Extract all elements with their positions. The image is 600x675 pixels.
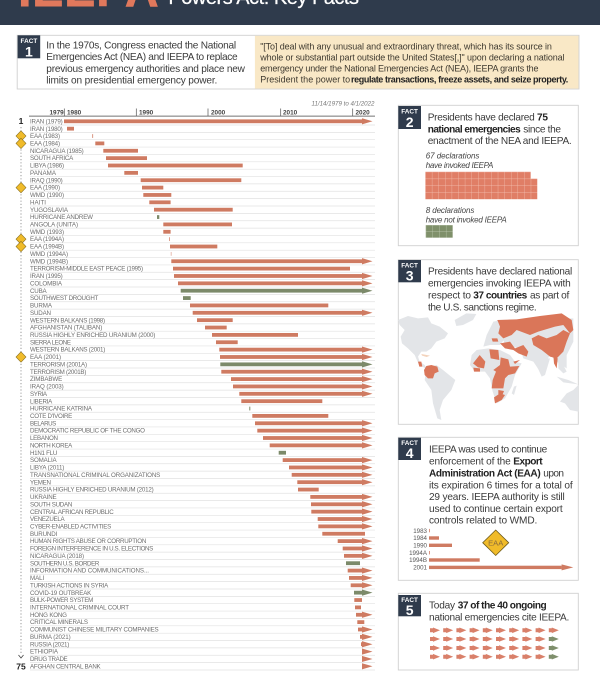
emergency rows: labels and duration bars: WMD (1993): [30, 229, 64, 236]
emergency rows: labels and duration bars: EAA (1990): [30, 185, 60, 192]
emergency rows: labels and duration bars: MALI: [30, 575, 45, 582]
quote box: emergency under the National Emergencies Act (NEA), IEEPA grants the: [260, 64, 538, 74]
fact 4 text: controls related to WMD.: [429, 516, 537, 527]
fact tag 5: FACT: [401, 597, 418, 604]
mini chart: EAA periods: [409, 528, 573, 572]
emergency rows: labels and duration bars: IRAQ (1990): [30, 177, 63, 184]
count track: 75: [16, 662, 26, 672]
fact 2 text: enactment of the NEA and IEEPA.: [428, 136, 572, 147]
panel: fact 5: [398, 593, 578, 670]
emergency rows: labels and duration bars: ZIMBABWE: [30, 376, 62, 383]
fact 4 text: Administration Act (EAA): [429, 468, 541, 479]
fact 1 text: Emergencies Act (NEA) and IEEPA to replace: [46, 52, 238, 63]
fact 1 text: [46, 40, 246, 87]
quote box: [255, 36, 578, 89]
mini chart: EAA periods: 2001: [413, 565, 428, 572]
fact 3 text: emergencies invoking IEEPA with: [428, 279, 571, 290]
emergency rows: labels and duration bars: BURUNDI: [30, 531, 58, 538]
fact 5 text: Today: [429, 601, 456, 612]
fact 2 text: [428, 112, 572, 147]
waffle label: invoked: 67 declarations: [426, 152, 479, 160]
waffle label: not invoked: have not invoked IEEPA: [426, 215, 507, 224]
emergency rows: labels and duration bars: BELARUS: [30, 420, 56, 427]
panel: fact 2: [398, 105, 578, 246]
emergency rows: labels and duration bars: IRAN (1995): [30, 273, 63, 280]
fact 4 text: upon: [543, 468, 564, 479]
emergency rows: labels and duration bars: INFORMATION AND COMMUNICATIONS...: [30, 568, 149, 575]
date range note: 11/14/1979 to 4/1/2022: [312, 100, 375, 108]
icon: EAA diamond sign: EAA: [488, 538, 504, 548]
emergency rows: labels and duration bars: [30, 118, 375, 670]
emergency rows: labels and duration bars: RUSSIA HIGHLY ENRICHED URANIUM (2012): [30, 487, 154, 494]
emergency rows: labels and duration bars: CYBER-ENABLED ACTIVITIES: [30, 523, 111, 530]
emergency rows: labels and duration bars: NORTH KOREA: [30, 442, 73, 449]
emergency rows: labels and duration bars: HURRICANE KATRINA: [30, 406, 93, 413]
fact tag 4: FACT: [401, 440, 418, 447]
waffle chart: 8 declarations: [426, 225, 453, 238]
fact 4 text: its expiration 6 times for a total of: [429, 480, 573, 491]
emergency rows: labels and duration bars: AFGHANISTAN (TALIBAN): [30, 325, 102, 332]
emergency rows: labels and duration bars: BURMA: [30, 303, 53, 310]
emergency rows: labels and duration bars: BURMA (2021): [30, 634, 71, 641]
fact 3 text: respect to: [428, 290, 471, 301]
emergency rows: labels and duration bars: LEBANON: [30, 435, 58, 442]
emergency rows: labels and duration bars: COLOMBIA: [30, 280, 63, 287]
emergency rows: labels and duration bars: TURKISH ACTIONS IN SYRIA: [30, 582, 109, 589]
emergency rows: labels and duration bars: YEMEN: [30, 479, 51, 486]
emergency rows: labels and duration bars: INTERNATIONAL CRIMINAL COURT: [30, 604, 129, 611]
fact tag 3: [398, 260, 421, 284]
emergency rows: labels and duration bars: AFGHAN CENTRAL BANK: [30, 663, 102, 670]
fact tag 3: FACT: [401, 262, 418, 270]
EAA diamond markers: [16, 131, 26, 362]
emergency rows: labels and duration bars: SOUTH SUDAN: [30, 501, 72, 508]
year axis: 2010: [283, 109, 298, 116]
fact 1 text: previous emergency authorities and place new: [46, 64, 246, 75]
year axis: 1979: [50, 109, 64, 116]
emergency rows: labels and duration bars: EAA (1994B): [30, 244, 64, 251]
emergency rows: labels and duration bars: EAA (1983): [30, 133, 60, 140]
emergency rows: labels and duration bars: WESTERN BALKANS (1998): [30, 317, 105, 324]
emergency rows: labels and duration bars: DRUG TRADE: [30, 656, 68, 663]
emergency rows: labels and duration bars: LIBERIA: [30, 398, 53, 405]
emergency rows: labels and duration bars: RUSSIA (2021): [30, 641, 69, 648]
emergency rows: labels and duration bars: HONG KONG: [30, 612, 67, 619]
emergency rows: labels and duration bars: EAA (2001): [30, 354, 61, 361]
fact 4 text: 29 years. IEEPA authority is still: [429, 492, 565, 503]
emergency rows: labels and duration bars: RUSSIA HIGHLY ENRICHED URANIUM (2000): [30, 332, 155, 339]
chart: timeline of 75 national emergencies: [16, 100, 375, 672]
fact 5 text: [429, 601, 569, 623]
fact 4 text: [429, 445, 573, 527]
emergency rows: labels and duration bars: EAA (1984): [30, 140, 60, 147]
panel: fact 3: [398, 260, 578, 424]
emergency rows: labels and duration bars: ETHIOPIA: [30, 649, 59, 656]
emergency rows: labels and duration bars: UKRAINE: [30, 494, 57, 501]
fact 2 text: 75: [537, 112, 548, 123]
year axis: [29, 108, 375, 116]
count track: [16, 116, 26, 672]
fact 4 text: IEEPA was used to continue: [429, 445, 548, 456]
emergency rows: labels and duration bars: WESTERN BALKANS (2001): [30, 347, 105, 354]
mini chart: EAA periods: 1984: [413, 535, 428, 542]
emergency rows: labels and duration bars: HAITI: [30, 199, 46, 206]
fact tag 4: [398, 438, 421, 461]
year axis: 2000: [211, 109, 226, 116]
fact tag 4: 4: [406, 445, 414, 461]
fact 5 text: national emergencies cite IEEPA.: [429, 612, 569, 623]
fact tag 3: 3: [406, 268, 414, 284]
panel: fact 4: [398, 437, 578, 580]
fact tag 2: [398, 106, 421, 130]
mini chart: EAA periods: 1983: [413, 528, 428, 535]
emergency rows: labels and duration bars: IRAN (1979): [30, 118, 63, 125]
land masses: [398, 313, 578, 420]
year axis: 1990: [139, 109, 154, 116]
emergency rows: labels and duration bars: PANAMA: [30, 170, 57, 177]
quote box: whole or substantial part outside the United States[,]" upon declaring a national: [259, 53, 564, 63]
emergency rows: labels and duration bars: LIBYA (2011): [30, 465, 64, 472]
emergency rows: labels and duration bars: IRAN (1980): [30, 126, 63, 133]
emergency rows: labels and duration bars: SYRIA: [30, 391, 48, 398]
emergency rows: labels and duration bars: WMD (1990): [30, 192, 64, 199]
emergency rows: labels and duration bars: DEMOCRATIC REPUBLIC OF THE CONGO: [30, 428, 145, 435]
fact 4 text: enforcement of the: [429, 457, 511, 468]
emergency rows: labels and duration bars: WMD (1994B): [30, 258, 68, 265]
emergency rows: labels and duration bars: CENTRAL AFRICAN REPUBLIC: [30, 509, 114, 516]
year axis: 1980: [67, 109, 82, 116]
waffle label: not invoked: 8 declarations: [426, 206, 474, 215]
sanctioned countries: [418, 313, 573, 403]
world map: [398, 313, 578, 420]
icon: EAA diamond sign: [483, 530, 509, 556]
waffle chart: 67 declarations: [425, 172, 537, 199]
emergency rows: labels and duration bars: TRANSNATIONAL CRIMINAL ORGANIZATIONS: [30, 472, 160, 479]
emergency rows: labels and duration bars: CRITICAL MINERALS: [30, 619, 88, 626]
fact 3 text: the U.S. sanctions regime.: [428, 302, 537, 313]
emergency rows: labels and duration bars: NICARAGUA (2018): [30, 553, 84, 560]
quote box: President the power to: [260, 75, 350, 85]
emergency rows: labels and duration bars: LIBYA (1986): [30, 163, 64, 170]
quote box: regulate transactions, freeze assets, and seize property.: [351, 75, 568, 85]
waffle label: invoked: [426, 152, 493, 170]
emergency rows: labels and duration bars: HURRICANE ANDREW: [30, 214, 93, 221]
emergency rows: labels and duration bars: SOUTHWEST DROUGHT: [30, 295, 99, 302]
fact 3 text: [428, 267, 572, 313]
icon array: 37 of 40 emergencies: [430, 628, 559, 660]
fact 5 text: 37 of the 40 ongoing: [458, 601, 547, 612]
fact 3 text: Presidents have declared national: [428, 267, 572, 278]
emergency rows: labels and duration bars: TERRORISM (2001B): [30, 369, 86, 376]
fact tag 2: 2: [406, 114, 414, 130]
fact 2 text: Presidents have declared: [428, 112, 535, 123]
waffle label: invoked: have invoked IEEPA: [426, 161, 493, 170]
fact 2 text: since the: [523, 124, 561, 135]
panel: fact 1: [17, 35, 579, 89]
fact tag 1: FACT: [21, 38, 37, 45]
waffle label: not invoked: [426, 206, 507, 224]
emergency rows: labels and duration bars: VENEZUELA: [30, 516, 66, 523]
emergency rows: labels and duration bars: NICARAGUA (1985): [30, 148, 84, 155]
emergency rows: labels and duration bars: SOMALIA: [30, 457, 58, 464]
fact tag 1: [18, 35, 40, 60]
year axis: 2020: [356, 109, 370, 116]
fact 3 text: as part of: [530, 290, 569, 301]
emergency rows: labels and duration bars: FOREIGN INTERFERENCE IN U.S. ELECTIONS: [30, 546, 153, 553]
emergency rows: labels and duration bars: H1N1 FLU: [30, 450, 57, 457]
emergency rows: labels and duration bars: TERRORISM (2001A): [30, 361, 87, 368]
emergency rows: labels and duration bars: SIERRA LEONE: [30, 339, 71, 346]
emergency rows: labels and duration bars: COTE D'IVOIRE: [30, 413, 72, 420]
emergency rows: labels and duration bars: YUGOSLAVIA: [30, 207, 69, 214]
fact tag 5: 5: [406, 602, 414, 618]
emergency rows: labels and duration bars: SOUTH AFRICA: [30, 155, 74, 162]
mini chart: EAA periods: 1994B: [409, 557, 427, 564]
fact 4 text: used to continue certain export: [429, 504, 563, 515]
emergency rows: labels and duration bars: HUMAN RIGHTS ABUSE OR CORRUPTION: [30, 538, 146, 545]
quote box: "[To] deal with any unusual and extraordinary threat, which has its source in: [260, 42, 552, 52]
emergency rows: labels and duration bars: ANGOLA (UNITA): [30, 222, 78, 229]
fact tag 1: 1: [25, 44, 33, 60]
fact tag 5: [398, 595, 421, 618]
mini chart: EAA periods: 1994A: [409, 550, 428, 557]
fact 3 text: 37 countries: [473, 290, 528, 301]
emergency rows: labels and duration bars: CUBA: [30, 288, 48, 295]
emergency rows: labels and duration bars: IRAQ (2003): [30, 384, 64, 391]
fact 1 text: In the 1970s, Congress enacted the National: [46, 40, 236, 51]
emergency rows: labels and duration bars: SUDAN: [30, 310, 51, 317]
fact 1 text: limits on presidential emergency power.: [46, 76, 217, 87]
emergency rows: labels and duration bars: BULK-POWER SYSTEM: [30, 597, 93, 604]
header banner: [0, 0, 600, 25]
emergency rows: labels and duration bars: COVID-19 OUTBREAK: [30, 590, 92, 597]
fact 4 text: Export: [513, 457, 543, 468]
mini chart: EAA periods: 1990: [413, 542, 428, 550]
emergency rows: labels and duration bars: COMMUNIST CHINESE MILITARY COMPANIES: [30, 627, 159, 634]
emergency rows: labels and duration bars: TERRORISM-MIDDLE EAST PEACE (1995): [30, 266, 143, 273]
emergency rows: labels and duration bars: WMD (1994A): [30, 251, 68, 258]
fact 2 text: national emergencies: [428, 124, 521, 135]
emergency rows: labels and duration bars: EAA (1994A): [30, 236, 64, 243]
fact tag 2: FACT: [401, 109, 418, 116]
count track: 1: [19, 116, 24, 126]
emergency rows: labels and duration bars: SOUTHERN U.S. BORDER: [30, 560, 100, 567]
